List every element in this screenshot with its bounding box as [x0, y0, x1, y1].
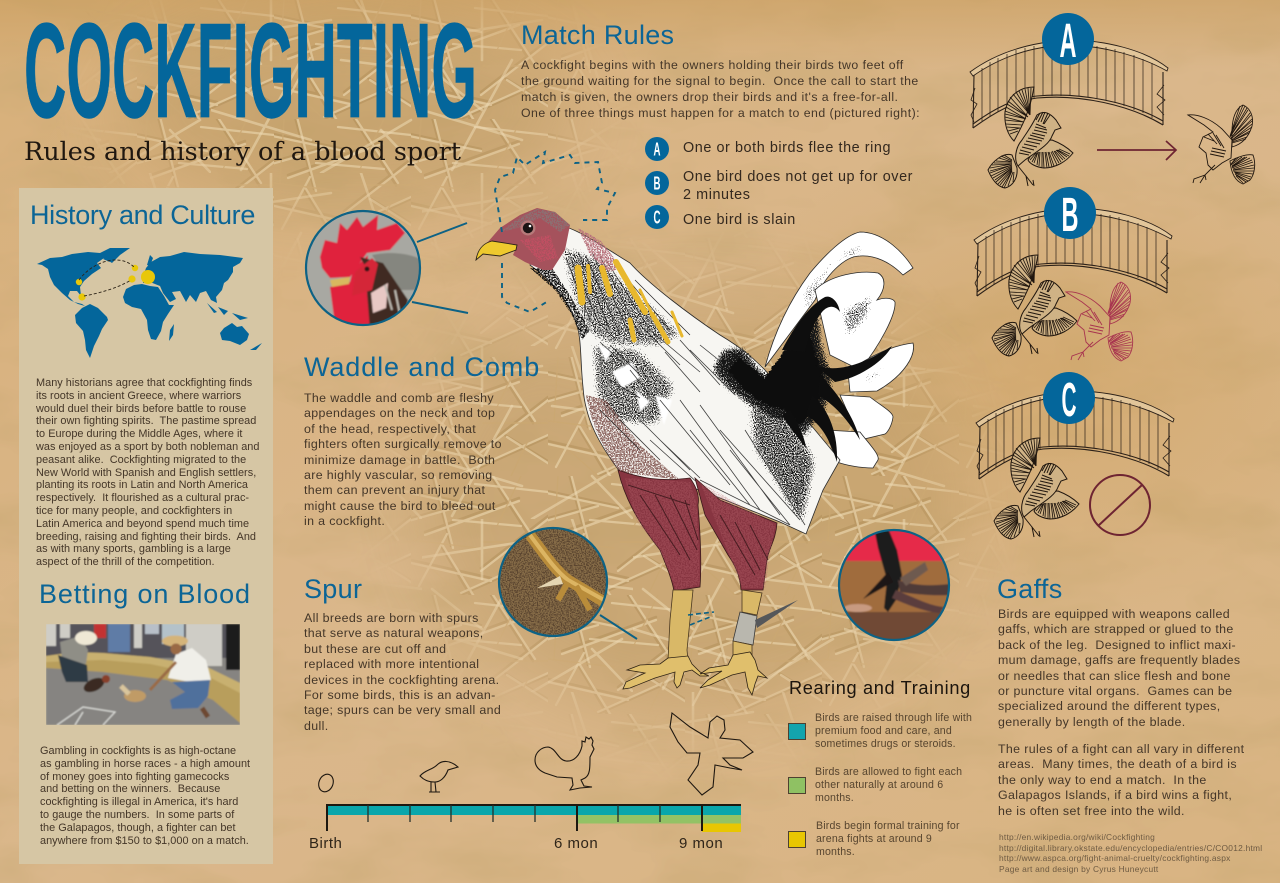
heading: gaffs: Gaffs	[997, 574, 1063, 604]
text: spur: but these are cut off and	[304, 642, 446, 656]
text: gaffs rules: he is often set free into the wild.	[998, 804, 1185, 818]
legend text 2: months.	[815, 792, 854, 804]
text: gaffs: Birds are equipped with weapons called	[998, 607, 1230, 621]
dashed outline: natural spur	[688, 612, 714, 625]
text: spur	[304, 611, 501, 733]
dashed outline: removed waddle	[502, 263, 550, 312]
text: match rules: A cockfight begins with the owners holding their birds two feet off	[521, 58, 904, 72]
text: waddle and comb: in a cockfight.	[304, 514, 385, 528]
sources and credit	[999, 832, 1262, 874]
text: match rules	[521, 58, 920, 120]
text: history: aspect of the thrill of the competition.	[36, 556, 215, 568]
text: match rules: One of three things must happen for a match to end (pictured right):	[521, 106, 920, 120]
white patches on breast	[598, 345, 672, 425]
text: betting: anywhere from $150 to $1,000 on a match.	[40, 835, 249, 847]
heading: spur: Spur	[304, 574, 362, 604]
rule B text	[683, 169, 913, 203]
timeline label: birth: Birth	[309, 835, 342, 852]
text: gaffs	[998, 607, 1240, 729]
text: history: its roots in ancient Greece, where warriors	[36, 390, 241, 402]
text: waddle and comb: The waddle and comb are fleshy	[304, 391, 494, 405]
world map	[37, 248, 262, 358]
text: gaffs: or puncture vital organs. Games can be	[998, 684, 1232, 698]
diagram A: bird flees ring	[970, 13, 1255, 188]
text: betting: to gauge the numbers. In some parts of	[40, 809, 234, 821]
beak	[476, 241, 517, 260]
text: gaffs rules: The rules of a fight can all vary in different	[998, 742, 1244, 756]
legend text 3: arena fights at around 9	[816, 833, 932, 845]
rule B text: 2 minutes	[683, 187, 751, 203]
rooster illustration	[476, 208, 913, 695]
tail spikes	[782, 297, 892, 462]
sources and credit: http://en.wikipedia.org/wiki/Cockfighting	[999, 832, 1155, 842]
legend text 1	[815, 712, 972, 750]
black tail core	[728, 330, 826, 425]
heading: rearing and training: Rearing and Training	[789, 678, 971, 698]
text: history: breeding, raising and fighting their birds. And	[36, 531, 256, 543]
badge: rule A	[645, 137, 669, 161]
text: spur: devices in the cockfighting arena.	[304, 673, 499, 687]
text: gaffs: mum damage, gaffs are frequently blades	[998, 653, 1240, 667]
diagram B: bird does not get up	[974, 187, 1172, 361]
text: gaffs rules: Galapagos Islands, if a bird wins a fight,	[998, 788, 1232, 802]
diagram B: bird does not get up: B	[1062, 189, 1078, 242]
text: gaffs: generally by length of the blade.	[998, 715, 1186, 729]
legend text 2: other naturally at around 6	[815, 779, 943, 791]
sources and credit: Page art and design by Cyrus Huneycutt	[999, 864, 1158, 874]
text: gaffs: back of the leg. Designed to inflict maxi-	[998, 638, 1236, 652]
legend text 1: premium food and care, and	[815, 725, 952, 737]
circle: comb and waddle photo	[304, 210, 422, 326]
text: spur: For some birds, this is an advan-	[304, 688, 496, 702]
circle: gaff photo	[838, 528, 950, 642]
rule B text: One bird does not get up for over	[683, 169, 913, 185]
pink upper neck	[578, 228, 622, 272]
text: gaffs rules	[998, 742, 1244, 818]
badge: rule A: A	[654, 140, 660, 160]
badge: rule B: B	[654, 174, 660, 194]
rule A text: One or both birds flee the ring	[683, 140, 891, 156]
legs	[668, 590, 693, 660]
plume shading	[800, 240, 895, 388]
text: gaffs rules: areas. Many times, the death of a bird is	[998, 757, 1237, 771]
neck hackle dark edge	[530, 268, 590, 340]
text: history: would duel their birds before battle to rouse	[36, 403, 246, 415]
text: match rules: match is given, the owners drop their birds and it's a free-for-all.	[521, 90, 898, 104]
text: betting: the Galapagos, though, a fighter can bet	[40, 822, 236, 834]
text: betting: Gambling in cockfights is as high-octane	[40, 745, 236, 757]
panel: history and betting	[19, 188, 273, 864]
text: history: their own fighting spirits. The pastime spread	[36, 415, 256, 427]
legend text 3: months.	[816, 846, 855, 858]
photo: cockfight ring	[46, 624, 240, 725]
thighs	[618, 470, 701, 591]
tail plumes	[765, 232, 913, 468]
text: gaffs: or needles that can slice flesh and bone	[998, 669, 1231, 683]
thigh highlight speckle	[625, 478, 775, 590]
text: waddle and comb: might cause the bird to bleed out	[304, 499, 496, 513]
black tail mass	[708, 300, 836, 445]
text: spur: replaced with more intentional	[304, 657, 479, 671]
heading: history and culture: History and Culture	[30, 200, 255, 230]
legend text 2: Birds are allowed to fight each	[815, 766, 962, 778]
text: gaffs rules: the only way to end a match. In the	[998, 773, 1207, 787]
dashed outline: removed comb	[495, 152, 615, 232]
text: betting: of money goes into fighting gamecocks	[40, 771, 229, 783]
text: history: tice for many people, and cockfighters in	[36, 505, 232, 517]
text: history: peasant alike. Cockfighting migrated to the	[36, 454, 246, 466]
connector lines: comb	[412, 223, 468, 313]
gaff band and blade	[733, 612, 757, 645]
text: spur: dull.	[304, 719, 329, 733]
text: betting: cockfighting is illegal in America, it's hard	[40, 796, 238, 808]
sources and credit: http://digital.library.okstate.edu/encyclopedia/entries/C/CO012.html	[999, 842, 1262, 852]
feet	[623, 656, 709, 689]
legend text 1: Birds are raised through life with	[815, 712, 972, 724]
text: spur: All breeds are born with spurs	[304, 611, 479, 625]
text: history: Latin America and beyond spend much time	[36, 518, 249, 530]
text: match rules: the ground waiting for the signal to begin. Once the call to start the	[521, 74, 919, 88]
lower wing grey	[745, 400, 820, 530]
wing streaks	[600, 325, 805, 525]
text: betting: as gambling in horse races - a high amount	[40, 758, 250, 770]
neck stipple	[556, 240, 690, 350]
head	[487, 208, 570, 270]
text: waddle and comb: fighters often surgically remove to	[304, 437, 502, 451]
text: spur: tage; spurs can be very small and	[304, 703, 501, 717]
heading: match rules: Match Rules	[521, 20, 674, 50]
text: waddle and comb: of the head, respectively, that	[304, 422, 476, 436]
text: history: as with many sports, gambling is a large	[36, 543, 231, 555]
text: history: planting its roots in Latin and North America	[36, 479, 248, 491]
circle: natural spur photo	[495, 525, 611, 641]
timeline label: 6 months: 6 mon	[554, 835, 598, 852]
eye	[520, 220, 536, 236]
growth silhouettes	[316, 713, 753, 795]
diagram C: bird slain	[976, 372, 1174, 539]
diagram A: bird flees ring: A	[1060, 15, 1076, 68]
yellow hackle feathers	[578, 262, 682, 342]
text: history	[36, 377, 260, 568]
text: history: Many historians agree that cockfighting finds	[36, 377, 252, 389]
legend text 3	[816, 820, 960, 858]
text: waddle and comb: them can prevent an injury that	[304, 483, 485, 497]
text: waddle and comb: minimize damage in battle. Both	[304, 453, 495, 467]
text: spur: that serve as natural weapons,	[304, 626, 484, 640]
lower breast pink shading	[586, 395, 680, 480]
timeline bar	[327, 804, 741, 832]
connector line: spur	[600, 615, 637, 639]
subtitle: Rules and history of a blood sport	[24, 137, 461, 166]
text: betting: and betting on the winners. Because	[40, 783, 220, 795]
badge: rule C	[645, 205, 669, 229]
text: waddle and comb: appendages on the neck and top	[304, 406, 495, 420]
timeline label: 9 months: 9 mon	[679, 835, 723, 852]
straw texture	[120, 0, 976, 736]
text: history: New World with Spanish and English settlers,	[36, 467, 256, 479]
text: waddle and comb: are highly vascular, so removing	[304, 468, 493, 482]
legend text 2	[815, 766, 962, 804]
heading: waddle and comb: Waddle and Comb	[304, 352, 540, 382]
diagram C: bird slain: C	[1062, 374, 1076, 427]
legend text 3: Birds begin formal training for	[816, 820, 960, 832]
badge: rule B	[645, 171, 669, 195]
body	[530, 222, 840, 534]
rule C text: One bird is slain	[683, 212, 796, 228]
text: gaffs: gaffs, which are strapped or glued to the	[998, 622, 1234, 636]
text: history: to Europe during the Middle Ages, where it	[36, 428, 242, 440]
text: waddle and comb	[304, 391, 502, 528]
text: betting	[40, 745, 250, 847]
breast mottling	[588, 340, 680, 430]
badge: rule C: C	[654, 208, 660, 228]
text: history: was enjoyed as a sport by both nobleman and	[36, 441, 260, 453]
text: history: respectively. It flourished as a cultural prac-	[36, 492, 249, 504]
legend swatches	[788, 724, 806, 848]
text: gaffs: specialized around the different types,	[998, 699, 1221, 713]
legend text 1: sometimes drugs or steroids.	[815, 738, 956, 750]
sources and credit: http://www.aspca.org/fight-animal-cruelty/cockfighting.aspx	[999, 853, 1231, 863]
heading: betting on blood: Betting on Blood	[39, 579, 251, 609]
